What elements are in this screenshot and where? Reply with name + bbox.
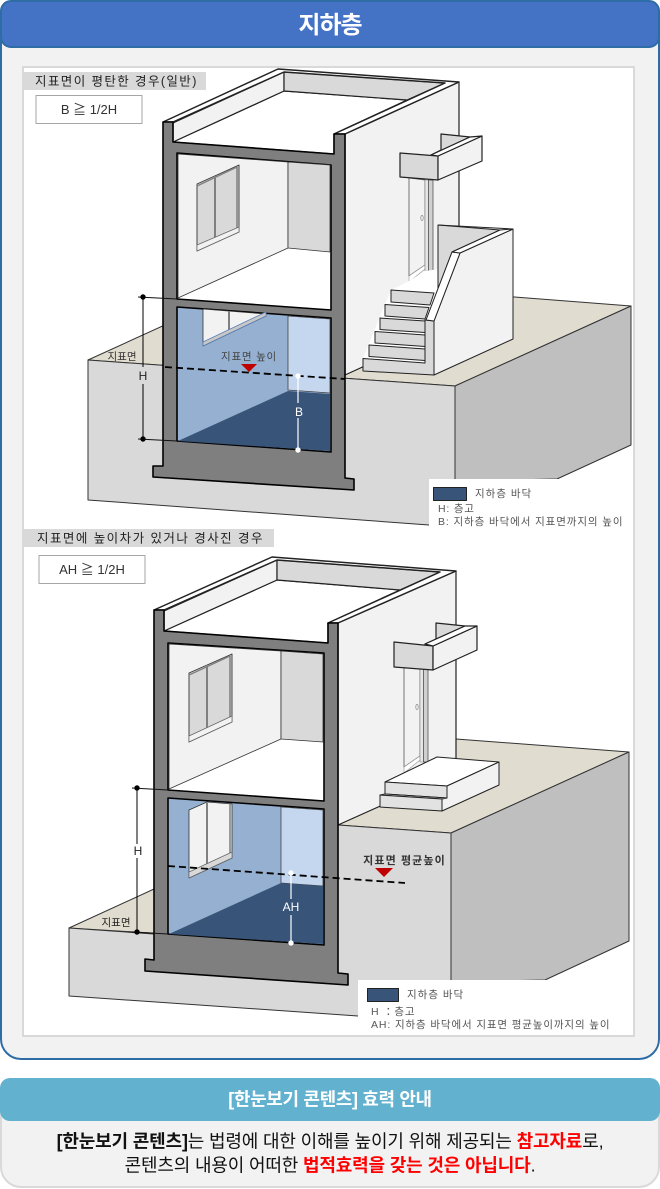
formula: B [36,96,142,124]
basement room [168,798,324,945]
upper room [177,153,331,310]
heading: sloped ground: 지표면에 높이차가 있거나 경사진 경우 [37,532,264,546]
formula: B: B ≧ 1/2H [61,102,117,117]
label: ground surface height: 지표면 높이 [221,351,277,363]
label: ground surface height [221,351,277,372]
section through the building [153,122,354,490]
canopy [400,134,482,180]
entrance door [404,667,428,773]
notice header [0,1078,660,1121]
average ground level dashed line [168,866,405,883]
formula: AH: AH ≧ 1/2H [59,562,125,577]
notice text [57,1132,603,1176]
legend 2 [358,980,633,1035]
notice text: [한눈보기 콘텐츠]는 법령에 대한 이해를 높이기 위해 제공되는 참고자료로, [57,1132,603,1152]
upper room [168,643,324,801]
upper window [189,654,232,742]
diagram 2: sloped ground [24,529,633,1035]
legend 1: B: 지하층 바닥에서 지표면까지의 높이 [438,515,623,528]
entrance door [409,178,433,282]
label: average ground height: 지표면 평균높이 [363,854,446,867]
ground block [69,739,629,1016]
section through the building [145,610,348,985]
dimension AH [283,870,299,946]
dimension B [295,373,303,453]
basement window [203,309,266,346]
notice header: [한눈보기 콘텐츠] 효력 안내 [228,1090,432,1110]
legend 2: H ：층고 [371,1006,415,1018]
dimension H: H [139,369,147,383]
ground block [88,278,631,525]
heading: flat ground [24,72,206,90]
ground level dashed line [165,367,345,379]
basement window [189,802,232,878]
legend 1: 지하층 바닥 [475,487,532,500]
exterior stairs [363,225,513,375]
title bar: 지하층 [298,12,363,39]
legend 2: AH: 지하층 바닥에서 지표면 평균높이까지의 높이 [371,1018,610,1031]
dimension H [138,294,177,442]
notice box [0,1078,660,1187]
dimension AH: AH [283,900,299,914]
notice text: 콘텐츠의 내용이 어떠한 법적효력을 갖는 것은 아닙니다. [125,1156,535,1176]
diagram 1: flat ground [24,69,633,528]
label: average ground height [363,854,446,877]
label: ground surface: 지표면 [108,351,136,363]
legend 1: H: 층고 [438,503,475,515]
dimension H [132,785,168,935]
entrance steps [380,757,499,811]
upper window [197,165,239,251]
basement room [177,307,331,452]
heading: flat ground: 지표면이 평탄한 경우(일반) [35,74,198,88]
white diagram area [23,67,634,1036]
dimension B: B [295,405,303,419]
title bar [1,1,659,47]
legend 1 [429,479,633,528]
formula: AH [39,556,145,584]
building exterior wall and roof [163,69,459,375]
label: ground surface: 지표면 [102,917,130,929]
legend 2: 지하층 바닥 [407,988,464,1001]
dimension H: H [134,844,142,858]
canopy [394,623,477,670]
building exterior wall and roof [154,557,456,825]
